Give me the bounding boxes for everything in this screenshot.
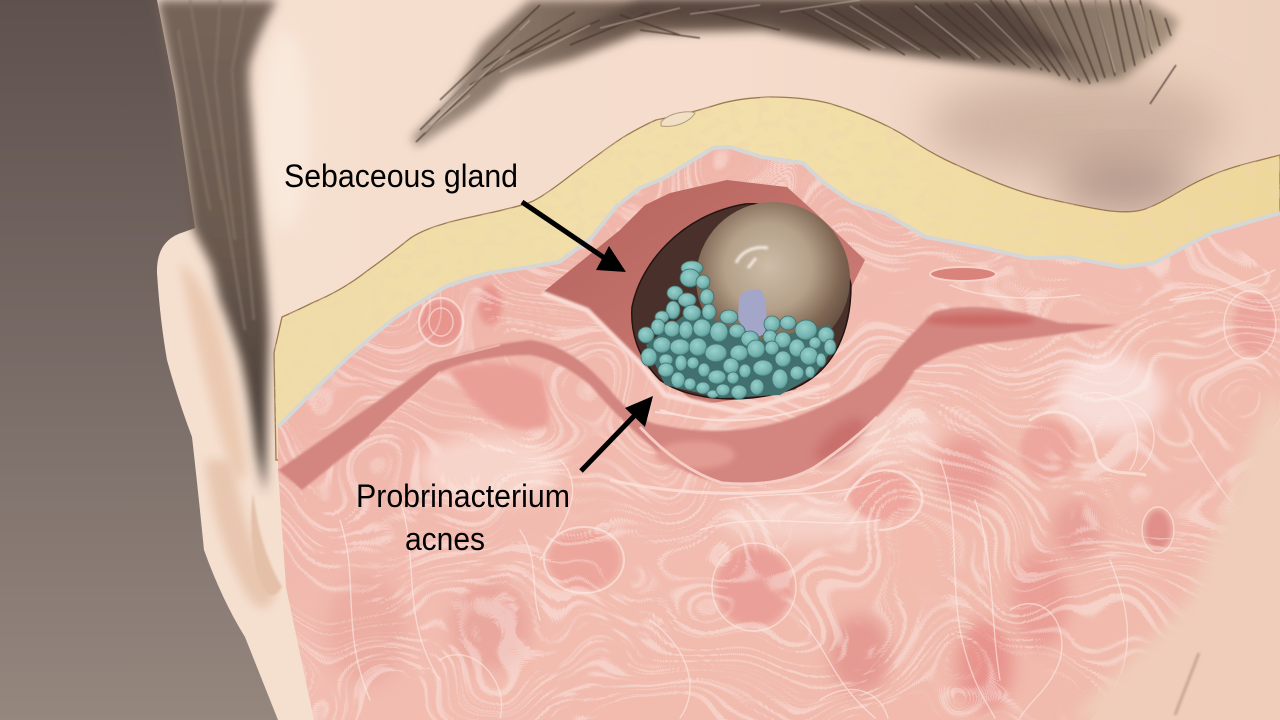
bacteria cluster	[638, 261, 836, 399]
yellow fat layer	[270, 90, 1280, 460]
gland cavity	[632, 202, 851, 399]
eyebrow	[412, 0, 1179, 147]
blocked duct plug	[738, 289, 766, 337]
label: bacterium name: Probrinacterium	[356, 478, 570, 514]
pocket around the gland	[542, 180, 865, 420]
hair sideburn	[157, 0, 277, 493]
dermis fibres	[340, 270, 1276, 718]
fold beneath the gland	[278, 307, 1118, 493]
small vessel slit	[930, 267, 996, 281]
arrow: sebaceous gland pointer	[522, 202, 626, 272]
silver membrane line	[278, 147, 1280, 427]
label: bacterium name: acnes	[405, 521, 485, 557]
label: bacterium name	[356, 478, 570, 557]
skin at lower right	[1069, 393, 1280, 720]
label: sebaceous gland: Sebaceous gland	[284, 158, 518, 194]
sebum sphere	[696, 202, 850, 356]
pink dermis layer	[278, 149, 1280, 720]
arrow: bacterium pointer	[581, 396, 653, 471]
